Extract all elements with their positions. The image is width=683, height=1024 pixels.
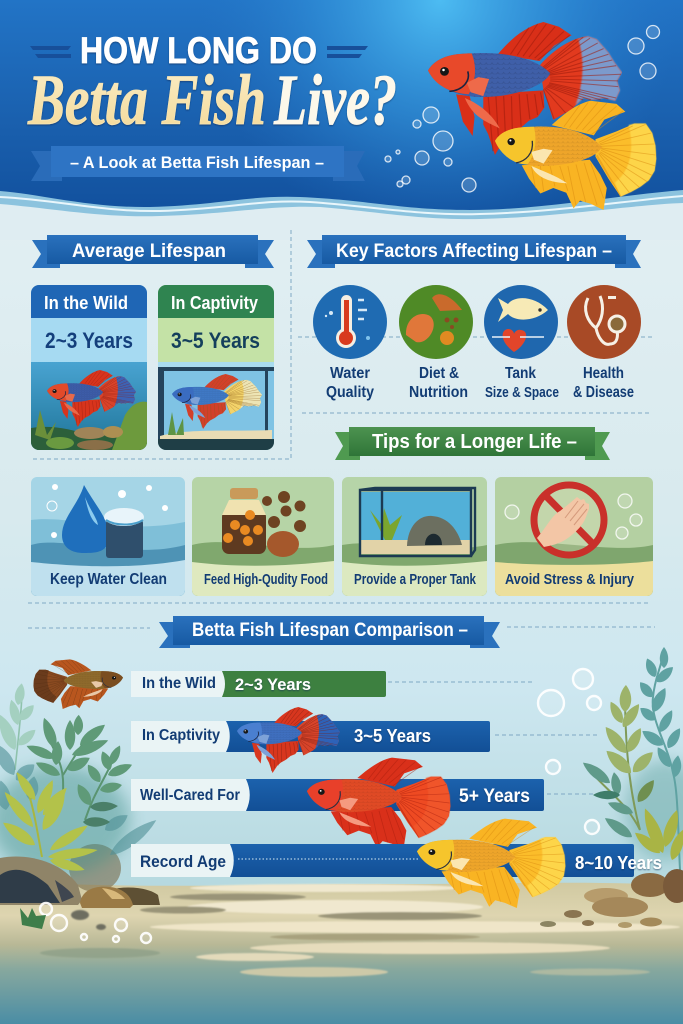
bar: record age: Record Age — [140, 852, 226, 871]
tip card: proper tank: Provide a Proper Tank — [354, 571, 477, 588]
factor: water quality: Water — [330, 365, 370, 382]
bubbles: lower — [40, 669, 601, 943]
icon: food jar — [222, 510, 266, 554]
factor: tank size and space: Tank — [505, 365, 536, 382]
title line 1: HOW LONG DO — [80, 30, 317, 71]
factor: tank size and space: Size & Space — [485, 384, 559, 401]
factor: health and disease: & Disease — [573, 384, 634, 401]
heading: key factors: Key Factors Affecting Lifespan – — [336, 241, 612, 262]
tip card: proper tank — [342, 477, 487, 600]
icon: thermometer — [313, 285, 387, 359]
tip card: keep water clean — [31, 477, 185, 600]
bubbles: header — [385, 26, 660, 192]
bar: in captivity — [131, 721, 490, 752]
background foliage glow — [0, 765, 130, 875]
bar: well-cared for: 5+ Years — [459, 786, 530, 807]
bar: in captivity: 3~5 Years — [354, 726, 431, 746]
bar: in the wild — [131, 671, 386, 697]
bar: in the wild: 2~3 Years — [235, 675, 311, 694]
icon: red fish — [307, 758, 450, 849]
icon: aquarium — [361, 492, 470, 540]
title script: Betta Fish — [27, 60, 266, 140]
header banner — [0, 0, 683, 240]
icon: no-hand sign — [534, 485, 604, 555]
bar: well-cared for — [131, 779, 544, 811]
icon: brown fish — [33, 659, 123, 709]
tip card: feed food — [192, 477, 334, 600]
heading: comparison: Betta Fish Lifespan Comparison – — [192, 620, 468, 641]
bar: record age — [131, 844, 662, 877]
factor: tank size and space — [484, 285, 559, 401]
title decoration right — [327, 46, 368, 58]
tip card: feed food: Feed High-Qudity Food — [204, 571, 328, 588]
heading: key factors — [307, 235, 641, 268]
title decoration left — [30, 46, 71, 58]
panel: in the wild card — [31, 285, 147, 450]
icon: fish and heart — [484, 285, 558, 359]
bar: in captivity: In Captivity — [142, 727, 220, 744]
seaweed sprout — [20, 908, 46, 929]
title — [27, 30, 397, 140]
icon: blue and red fish — [237, 707, 340, 773]
factor: diet and nutrition: Nutrition — [409, 384, 468, 401]
icon: blue fish — [172, 374, 262, 429]
factor: diet and nutrition — [399, 285, 473, 401]
bar: well-cared for: Well-Cared For — [140, 787, 240, 804]
heading: comparison — [159, 616, 500, 648]
heading: average lifespan: Average Lifespan — [72, 241, 226, 262]
factor: health and disease — [567, 285, 641, 401]
icon: water drop — [62, 485, 109, 553]
icon: red fish — [47, 370, 136, 427]
rocks left — [0, 856, 160, 908]
tip card: avoid stress — [495, 477, 653, 600]
bar: in the wild: In the Wild — [142, 675, 216, 692]
plants left — [0, 683, 160, 875]
seabed sand — [0, 880, 683, 1024]
factor: diet and nutrition: Diet & — [419, 365, 459, 382]
panel: in captivity card — [158, 285, 274, 450]
icon: food pellets — [399, 285, 473, 359]
bar: record age: 8~10 Years — [575, 853, 662, 873]
subtitle ribbon: – A Look at Betta Fish Lifespan – — [70, 153, 324, 172]
heading: tips — [335, 427, 610, 460]
tip card: avoid stress: Avoid Stress & Injury — [505, 571, 635, 588]
factor: water quality — [313, 285, 387, 401]
icon: pellets — [262, 496, 272, 506]
rocks right — [540, 869, 683, 928]
subtitle ribbon — [31, 146, 365, 181]
title script end: Live? — [273, 60, 397, 140]
heading: tips: Tips for a Longer Life – — [372, 431, 577, 453]
plants right — [580, 647, 683, 870]
icon: stethoscope — [567, 285, 641, 359]
value: 2~3 years: 2~3 Years — [45, 328, 133, 353]
factor: water quality: Quality — [326, 384, 374, 401]
heading: average lifespan — [32, 235, 274, 268]
page background — [0, 200, 683, 900]
icon: filter — [106, 520, 143, 558]
red betta fish — [428, 22, 622, 155]
card heading: In the Wild — [44, 293, 128, 313]
rear rock left — [69, 844, 121, 892]
card heading: In Captivity — [171, 293, 258, 313]
icon: yellow fish — [417, 819, 565, 908]
value: 3~5 years: 3~5 Years — [171, 328, 260, 353]
factor: health and disease: Health — [583, 365, 624, 382]
section dividers — [28, 230, 655, 794]
tip card: keep water clean: Keep Water Clean — [50, 571, 167, 588]
water surface wave — [0, 190, 683, 240]
yellow betta fish — [495, 101, 656, 210]
